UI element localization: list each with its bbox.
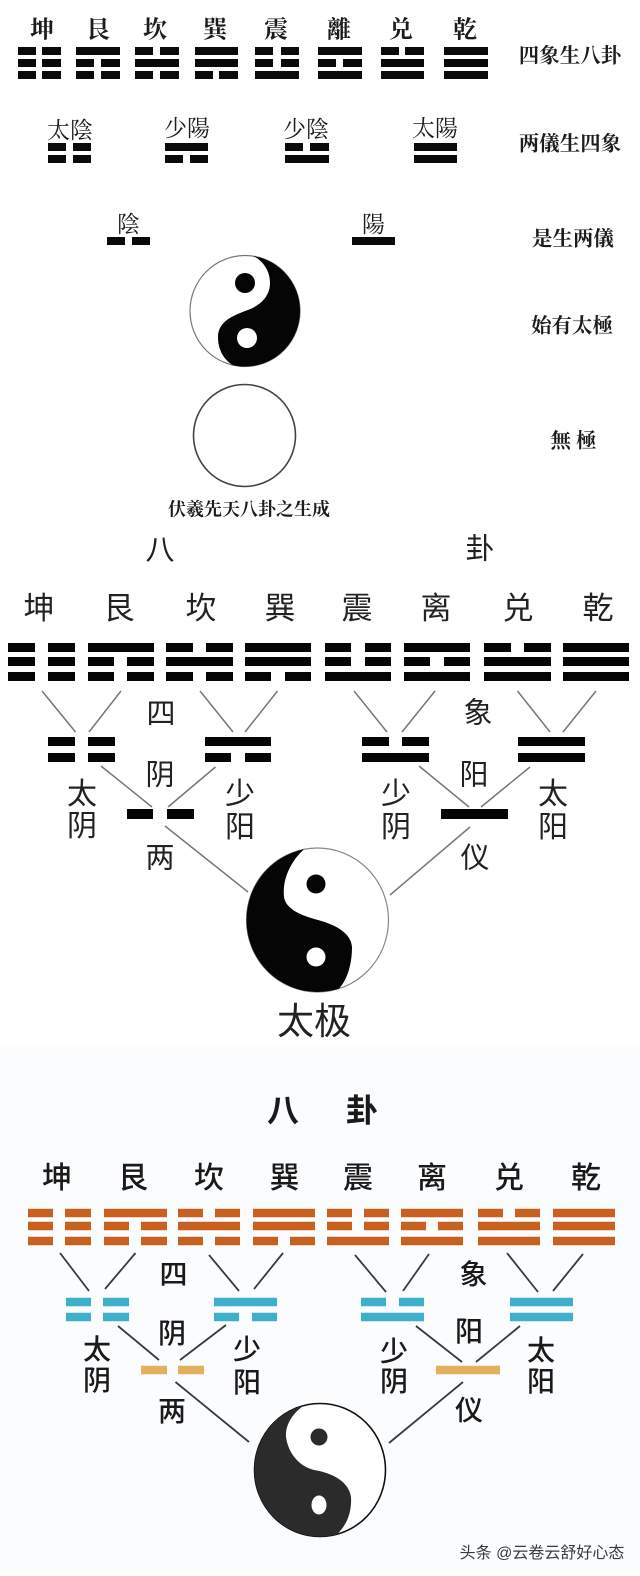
heading: 卦: [465, 532, 495, 566]
four image names: 阴: [83, 1365, 111, 1396]
trigram names: [42, 1162, 601, 1195]
label: then two forms are born: 是生两儀: [532, 228, 614, 250]
trigram names: 离: [420, 591, 452, 626]
trigram names: 坎: [143, 16, 167, 44]
four image names: 太陰: [47, 118, 93, 143]
eight trigrams: [28, 1213, 615, 1241]
taiji label: 太极: [277, 1001, 351, 1042]
trigram names: 坤: [42, 1162, 72, 1195]
four images label characters: 象: [463, 696, 493, 730]
connector lines: [60, 1253, 583, 1443]
four image names: 少陰: [283, 117, 329, 142]
trigram names: 兑: [494, 1162, 524, 1195]
yin and yang lines: [127, 809, 508, 819]
trigram names: 巽: [203, 16, 230, 44]
four image names: 太陽: [412, 116, 458, 141]
four image names: [83, 1334, 555, 1398]
four images label characters: [158, 1259, 488, 1427]
four images label characters: 阴: [145, 760, 175, 792]
yin and yang names: [117, 212, 385, 237]
trigram names: 坤: [24, 591, 54, 626]
four image names: 太: [527, 1335, 555, 1366]
trigram names: 兑: [389, 16, 413, 44]
four images label characters: 阴: [158, 1318, 186, 1349]
four image names: [67, 778, 568, 844]
icon: taiji: [190, 256, 300, 367]
caption: 伏羲先天八卦之生成: [168, 498, 330, 520]
eight trigrams: [18, 51, 488, 75]
four image names: 阳: [527, 1366, 555, 1397]
heading: [145, 532, 495, 566]
four image bigrams: [66, 1302, 573, 1317]
four image names: 阳: [538, 811, 568, 844]
panel: coloured diagram: [0, 1047, 640, 1573]
four images label characters: 阳: [459, 760, 489, 792]
eight trigrams: [8, 648, 629, 676]
trigram names: 震: [342, 591, 372, 626]
panel background: [0, 1047, 640, 1573]
icon: wuji empty circle: [194, 384, 296, 486]
label: wuji: 無 極: [550, 430, 597, 452]
label: four images produce eight trigrams: 四象生八卦: [519, 44, 623, 68]
four images label characters: 四: [159, 1259, 188, 1290]
four image names: 阴: [381, 811, 411, 844]
panel: simplified black and white diagram: [8, 532, 629, 1042]
panel: traditional Fuxi diagram: [18, 16, 623, 520]
heading: 卦: [346, 1092, 378, 1128]
icon: taiji: [254, 1404, 386, 1536]
four image names: 少: [380, 1336, 408, 1367]
trigram names: 乾: [453, 16, 477, 44]
heading: [267, 1092, 378, 1128]
yin and yang names: 陽: [362, 212, 385, 237]
heading: 八: [267, 1092, 299, 1128]
yin and yang lines: [107, 237, 395, 245]
four image names: 阴: [67, 810, 97, 843]
trigram names: 艮: [86, 16, 110, 44]
four image names: 阳: [233, 1367, 261, 1398]
trigram names: 乾: [582, 591, 614, 626]
trigram names: [24, 591, 614, 626]
yin and yang lines: [141, 1366, 500, 1374]
four image names: 少: [381, 778, 411, 811]
connector lines: [42, 691, 596, 895]
trigram names: 坎: [186, 591, 216, 626]
trigram names: 离: [417, 1162, 447, 1195]
four images label characters: 象: [459, 1259, 488, 1290]
trigram names: 坎: [194, 1162, 224, 1195]
four image names: 太: [83, 1334, 111, 1365]
yin and yang names: 陰: [117, 212, 140, 237]
label: two forms produce four images: 两儀生四象: [519, 132, 621, 156]
four image names: [47, 116, 458, 143]
four images label characters: 四: [146, 698, 176, 730]
four image names: 少陽: [164, 116, 210, 141]
four image bigrams: [48, 147, 457, 159]
four image names: 阳: [225, 811, 255, 844]
four image names: 太: [67, 778, 97, 811]
trigram names: 乾: [571, 1162, 601, 1195]
four images label characters: 两: [145, 842, 175, 874]
four images label characters: [145, 696, 493, 874]
heading: 八: [145, 534, 175, 566]
trigram names: 巽: [270, 1162, 300, 1195]
four image names: 少: [225, 778, 255, 811]
icon: taiji: [246, 848, 388, 992]
label: taiji begins: 始有太極: [531, 314, 613, 338]
trigram names: 震: [343, 1162, 373, 1195]
four images label characters: 阳: [455, 1316, 483, 1347]
four image names: 少: [233, 1334, 261, 1365]
four image names: 太: [538, 778, 568, 811]
four image bigrams: [48, 742, 585, 758]
four images label characters: 两: [158, 1396, 186, 1427]
trigram names: 艮: [118, 1162, 148, 1195]
trigram names: 兑: [502, 591, 534, 626]
trigram names: 震: [264, 16, 288, 44]
trigram names: 艮: [104, 591, 134, 626]
trigram names: [30, 16, 477, 44]
trigram names: 坤: [30, 16, 54, 44]
watermark: 头条 @云卷云舒好心态: [460, 1544, 624, 1562]
trigram names: 巽: [264, 591, 296, 626]
four images label characters: 仪: [460, 842, 490, 874]
trigram names: 離: [327, 16, 351, 44]
four image names: 阴: [380, 1366, 408, 1397]
four images label characters: 仪: [455, 1395, 483, 1426]
